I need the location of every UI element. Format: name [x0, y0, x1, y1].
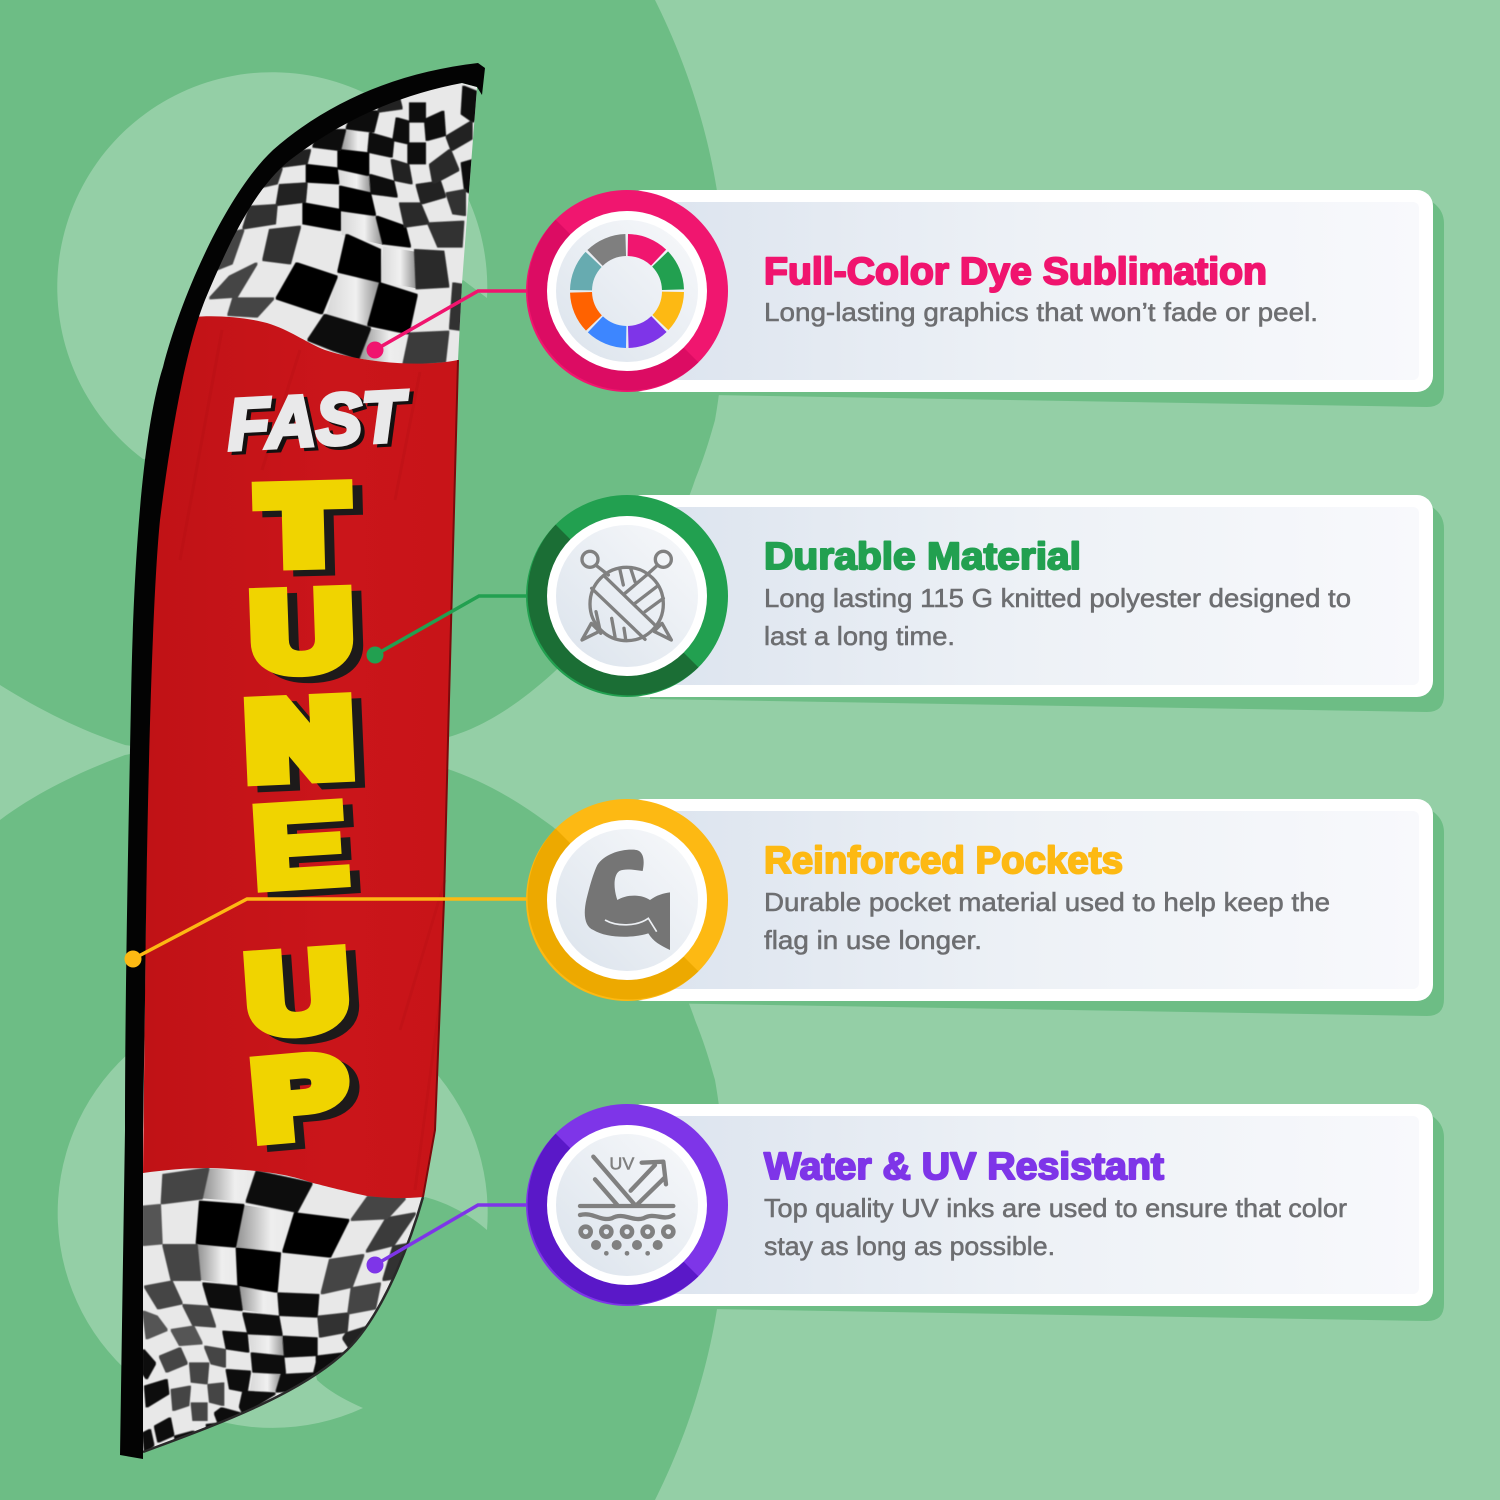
TUNE UP lettering: E: [248, 778, 351, 913]
title: Reinforced Pockets: [764, 840, 1123, 882]
FAST lettering: FAST: [225, 375, 412, 465]
right hem: [423, 360, 458, 1197]
connector: pink: [366, 291, 530, 358]
description: last a long time.: [764, 621, 955, 651]
card: Durable Material: [627, 495, 1444, 712]
bottom hem: [143, 1197, 423, 1452]
title: Full-Color Dye Sublimation: [764, 251, 1267, 293]
icon: flexed arm: [585, 850, 670, 950]
flag fabric base: [143, 83, 477, 1452]
card: Reinforced Pockets: [627, 799, 1444, 1016]
connector: yellow: [124, 899, 530, 968]
TUNE UP lettering: T: [261, 466, 345, 585]
description: Durable pocket material used to help keep the: [764, 887, 1330, 917]
badge: yarn: [526, 495, 728, 697]
description: Long-lasting graphics that won’t fade or peel.: [764, 297, 1318, 327]
title: Durable Material: [764, 536, 1081, 578]
red field: [143, 316, 458, 1198]
black pole sleeve: [120, 63, 485, 1459]
description: Top quality UV inks are used to ensure that color: [764, 1193, 1347, 1223]
card: Full-Color Dye Sublimation: [627, 190, 1444, 407]
icon: color wheel: [562, 226, 692, 356]
fabric folds: [180, 330, 445, 1190]
badge: muscle: [526, 799, 728, 1001]
badge: UV: [526, 1104, 728, 1306]
icon: UV and water resistance: [580, 1153, 673, 1256]
TUNE UP lettering: N: [246, 680, 353, 800]
TUNE UP lettering: U: [249, 568, 355, 694]
feather flag: [120, 63, 485, 1459]
TUNE UP lettering: [242, 466, 355, 1163]
title: Water & UV Resistant: [764, 1146, 1164, 1188]
description: Long lasting 115 G knitted polyester designed to: [764, 583, 1351, 613]
icon: yarn ball and needles: [582, 551, 671, 641]
icon: UV and water resistance: UV: [609, 1153, 634, 1173]
badge: color wheel: [526, 190, 728, 392]
card: Water and UV Resistant: [627, 1104, 1444, 1321]
connector: purple: [366, 1205, 530, 1274]
TUNE UP lettering: U: [242, 927, 352, 1057]
description: flag in use longer.: [764, 925, 982, 955]
TUNE UP lettering: P: [248, 1032, 352, 1163]
connector: green: [366, 596, 530, 664]
top checkered pattern: [143, 87, 480, 1452]
description: stay as long as possible.: [764, 1231, 1055, 1261]
bottom checkered pattern: [143, 1168, 415, 1452]
